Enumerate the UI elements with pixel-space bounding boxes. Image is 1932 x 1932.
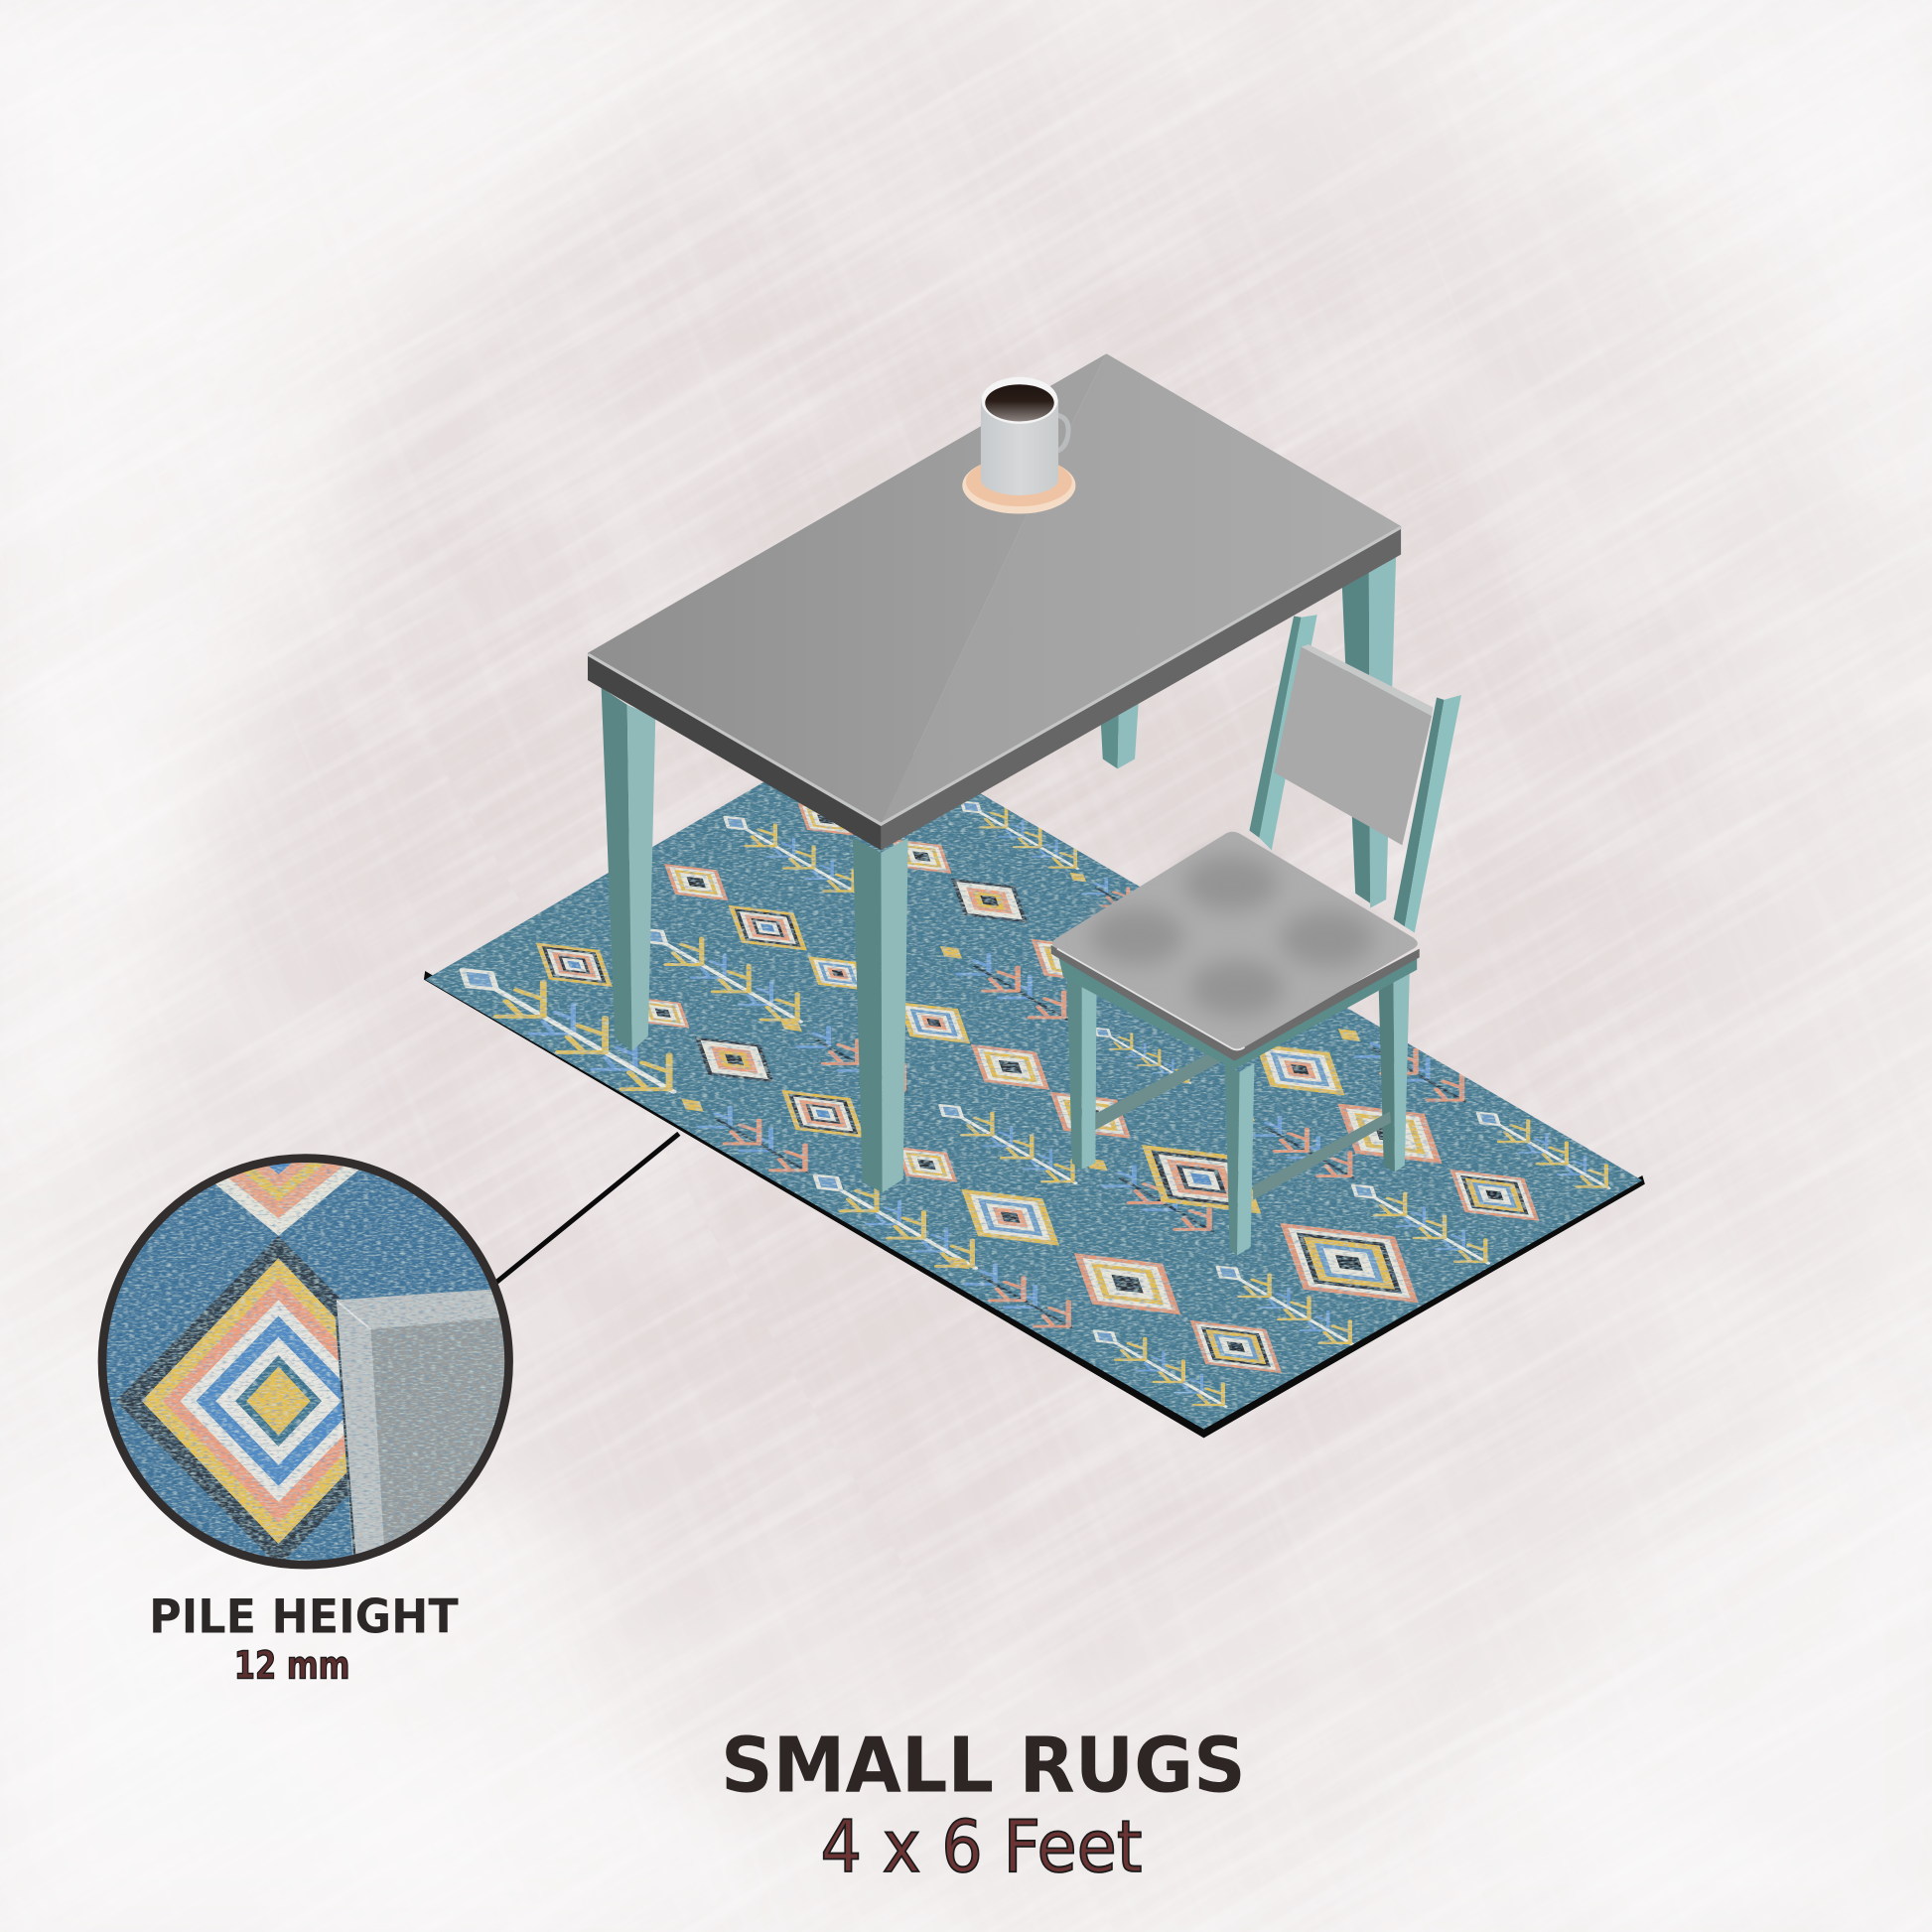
table front leg [853,838,908,1192]
chair seat [1051,832,1420,1061]
table right leg [1342,554,1396,908]
chair right back post [1394,695,1461,932]
chair back panel [1274,644,1433,845]
title: SMALL RUGS [721,1723,1246,1811]
coffee mug on coaster [962,377,1075,514]
table back leg [1100,702,1139,768]
rug pattern surface [425,725,1642,1430]
chair [1051,615,1461,1256]
rug [424,725,1645,1438]
callout leader line [492,1134,679,1285]
chair left leg [1067,977,1097,1170]
magnifier lens: pile detail [97,1154,513,1569]
seat dimples [1090,855,1374,1017]
subtitle: 4 x 6 Feet [821,1805,1142,1888]
table top [588,353,1401,850]
chair right leg [1379,972,1410,1172]
rug black edge [424,971,1645,1438]
table [588,353,1401,1192]
chair stretchers [1095,1052,1391,1200]
table left leg [602,688,655,1051]
lens ring [102,1159,509,1565]
label: 12 mm: 12 mm [234,1643,349,1688]
coffee [985,384,1054,421]
mug body [981,399,1058,495]
lens rug texture [106,1163,504,1561]
label: pile height: PILE HEIGHT [149,1589,459,1644]
coaster [962,457,1075,514]
chair apron [1058,954,1417,1069]
chair front leg [1225,1063,1254,1256]
chair left back post [1249,615,1317,850]
mug rim [982,377,1057,424]
mug handle [1057,415,1068,451]
